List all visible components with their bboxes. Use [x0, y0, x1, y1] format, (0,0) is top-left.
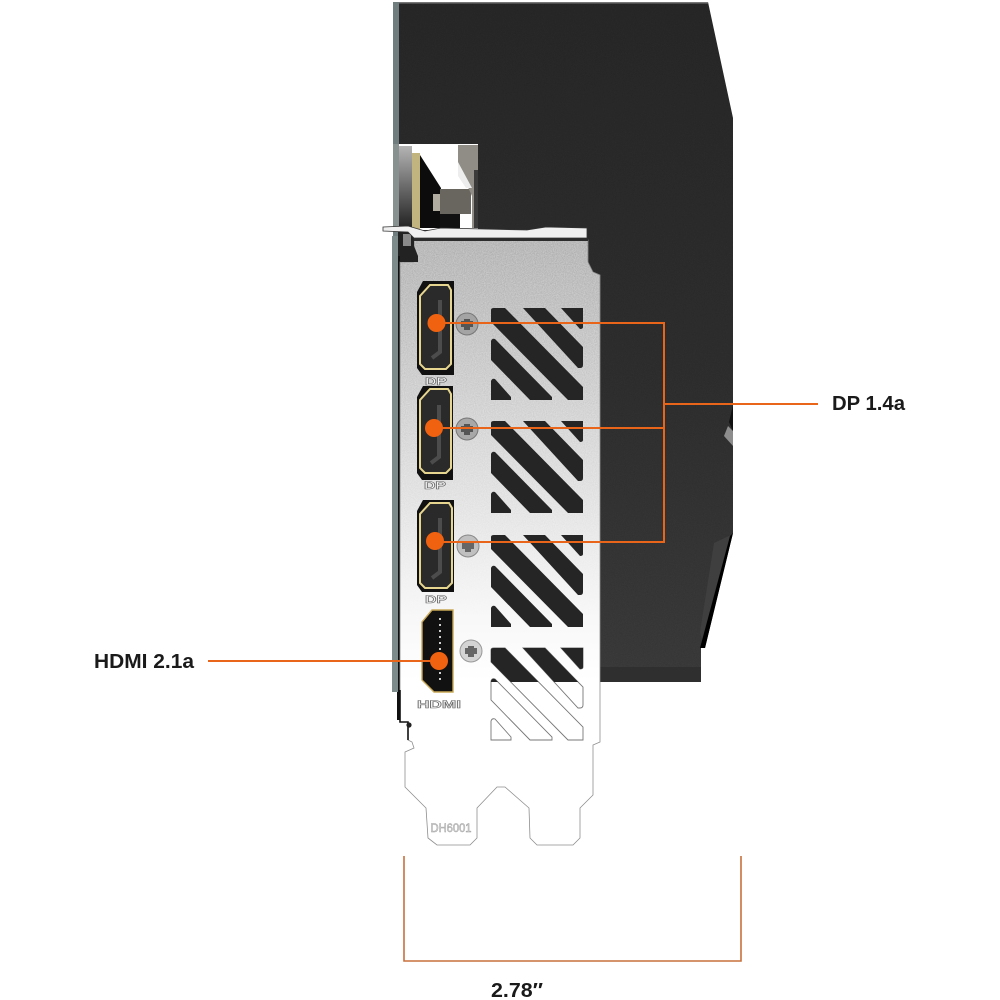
ventilation slots, row 4 outlined — [491, 648, 583, 740]
port labels — [417, 376, 461, 711]
width dimension bracket — [404, 856, 741, 961]
ventilation slots, row 3 — [491, 535, 583, 627]
inner cutout: cooler and PCB view — [393, 144, 478, 230]
port: HDMI — [422, 610, 453, 692]
callout lines: DP ports — [434, 323, 818, 542]
mounting bracket plate — [392, 236, 600, 845]
label: HDMI 2.1a: HDMI 2.1a — [94, 651, 195, 673]
port labels: DP — [425, 376, 447, 388]
port labels: DP — [424, 480, 446, 492]
top flange of bracket — [383, 226, 588, 262]
screws — [456, 313, 482, 662]
port labels: HDMI — [417, 699, 461, 711]
port: DisplayPort 3 — [417, 500, 454, 592]
callout dots — [425, 314, 448, 670]
port labels: DP — [425, 594, 447, 606]
ventilation slots, row 1 — [491, 308, 583, 400]
port: DisplayPort 1 — [417, 281, 454, 375]
bracket stamp code: DH6001 — [430, 821, 472, 835]
callout line: HDMI port — [208, 660, 439, 662]
ventilation slots, row 4 dark part — [491, 648, 583, 682]
label: DP 1.4a: DP 1.4a — [832, 393, 906, 415]
ventilation slots, row 2 — [491, 421, 583, 513]
port: DisplayPort 2 — [417, 386, 453, 480]
graphics card body — [393, 2, 733, 682]
